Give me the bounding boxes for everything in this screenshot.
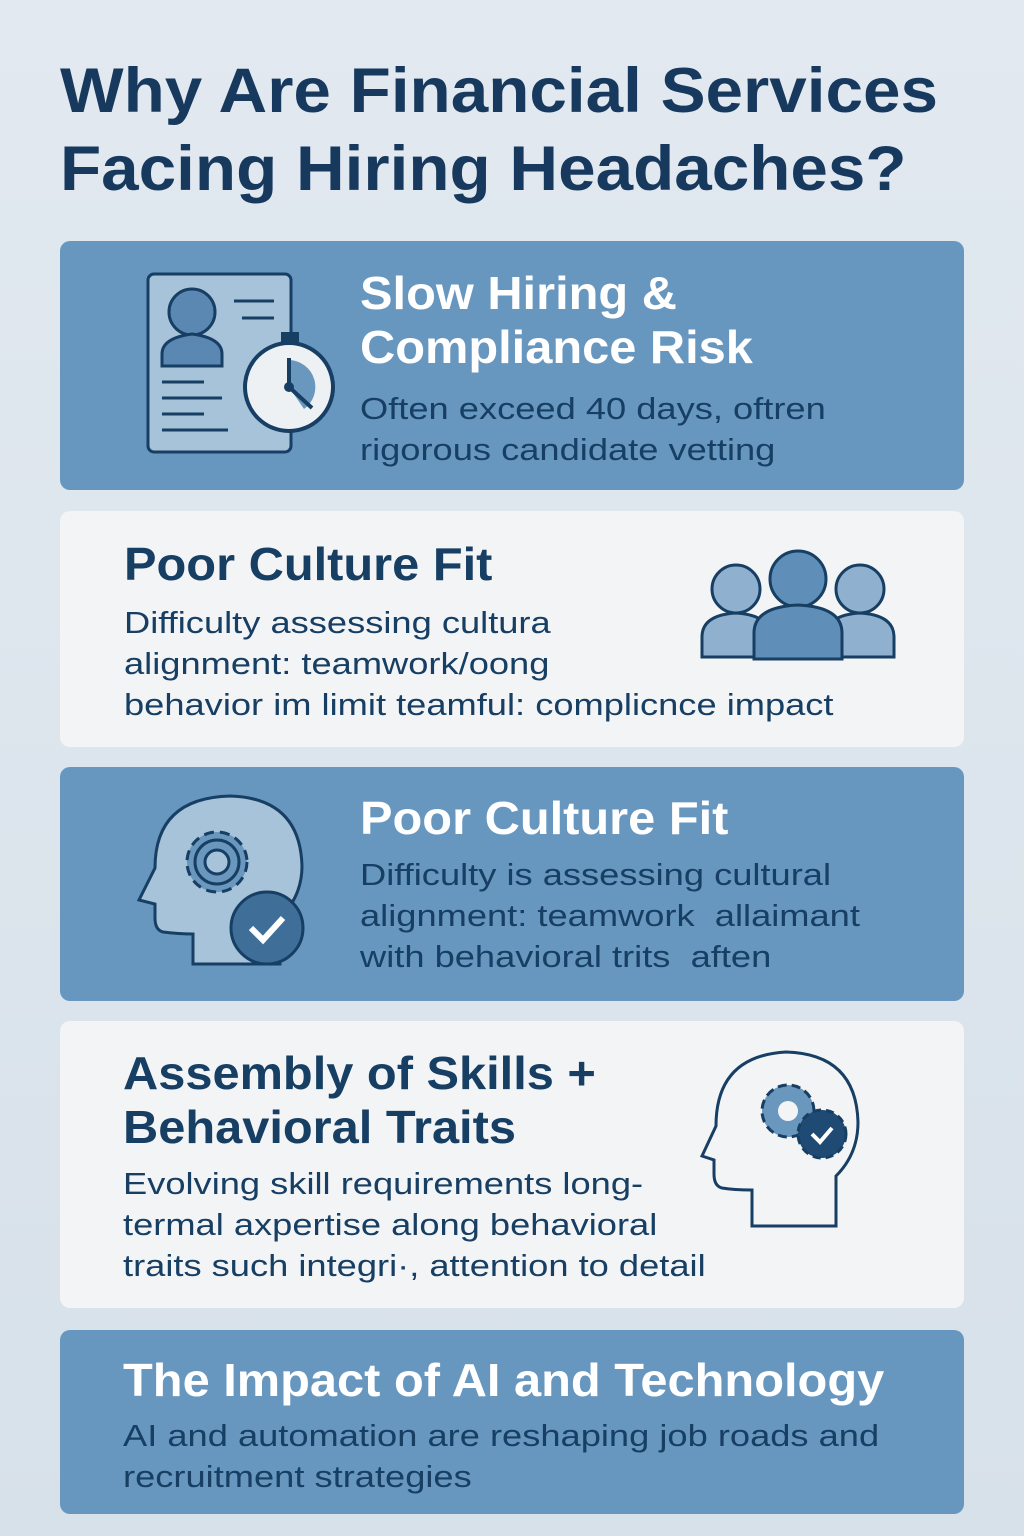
heading	[360, 267, 753, 373]
panel: slow hiring	[60, 241, 964, 490]
panel: poor culture fit 2	[60, 767, 964, 1001]
heading: Compliance Risk	[360, 321, 753, 373]
body text: Difficulty assessing cultura	[124, 605, 551, 640]
body text: AI and automation are reshaping job roads and	[123, 1418, 879, 1453]
title: Why Are Financial Services	[60, 56, 938, 126]
body text	[123, 1418, 879, 1494]
heading: Behavioral Traits	[123, 1101, 516, 1153]
heading: Poor Culture Fit	[124, 538, 492, 590]
body text	[124, 605, 834, 722]
heading: Poor Culture Fit	[360, 792, 728, 844]
body text	[360, 391, 826, 467]
body text: Evolving skill requirements long-	[123, 1166, 643, 1201]
body text	[360, 857, 860, 974]
body text: Often exceed 40 days, oftren	[360, 391, 826, 426]
body text: termal axpertise along behavioral	[123, 1207, 657, 1242]
body text	[123, 1166, 706, 1283]
heading: The Impact of AI and Technology	[123, 1354, 884, 1406]
panel: poor culture fit 1	[60, 511, 964, 747]
body text: Difficulty is assessing cultural	[360, 857, 831, 892]
body text: with behavioral trits aften	[360, 939, 771, 974]
icon: resume with stopwatch	[146, 272, 335, 454]
heading	[123, 1047, 596, 1153]
body text: rigorous candidate vetting	[360, 432, 775, 467]
body text: alignment: teamwork allaimant	[360, 898, 860, 933]
heading: Assembly of Skills +	[123, 1047, 596, 1099]
title: Facing Hiring Headaches?	[60, 134, 907, 204]
heading: Slow Hiring &	[360, 267, 677, 319]
panel: skills and traits	[60, 1021, 964, 1308]
icon: head with gears	[700, 1050, 860, 1228]
panel: AI impact	[60, 1330, 964, 1514]
icon: group of people	[700, 550, 896, 660]
title	[60, 56, 938, 204]
icon: head with gear and check	[136, 794, 304, 966]
body text: alignment: teamwork/oong	[124, 646, 549, 681]
body text: behavior im limit teamful: complicnce impact	[124, 687, 834, 722]
body text: recruitment strategies	[123, 1459, 472, 1494]
body text: traits such integri·, attention to detail	[123, 1248, 706, 1283]
